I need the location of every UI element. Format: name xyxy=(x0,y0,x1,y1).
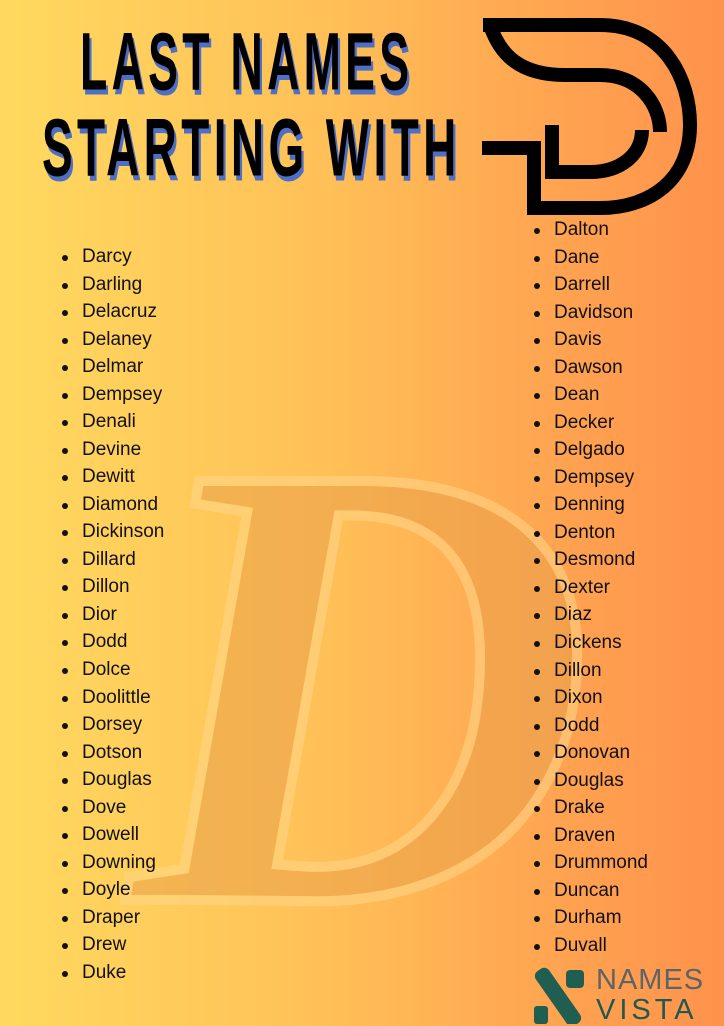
list: left column: Delacruz xyxy=(82,301,157,322)
list: left column: Delaney xyxy=(82,329,152,350)
title xyxy=(42,17,461,194)
list: left column: Dior xyxy=(82,604,117,625)
list: right column: Duvall xyxy=(554,935,607,956)
list: right column: Dawson xyxy=(554,357,623,378)
list: right column: Drummond xyxy=(554,852,648,873)
list: left column: Doolittle xyxy=(82,686,151,708)
list: right column: Dickens xyxy=(554,632,622,653)
list: left column: Drew xyxy=(82,934,126,955)
list: left column: Dove xyxy=(82,797,126,818)
list: left column: Delmar xyxy=(82,356,143,377)
list: left column: Dillon xyxy=(82,576,130,597)
icon: D logo xyxy=(482,18,697,215)
list: left column: Dickinson xyxy=(82,521,164,542)
list: right column: Drake xyxy=(554,797,605,818)
list: right column: Dodd xyxy=(554,715,599,736)
list: right column: Denton xyxy=(554,522,615,543)
list: right column: Dexter xyxy=(554,577,610,598)
list: left column: Dillard xyxy=(82,549,136,570)
list: right column: Dalton xyxy=(554,219,609,240)
list: right column: Donovan xyxy=(554,742,630,763)
list: right column: Duncan xyxy=(554,880,620,901)
list: right column: Davis xyxy=(554,329,602,350)
list: left column: Doyle xyxy=(82,879,131,900)
title: STARTING WITH xyxy=(42,103,461,194)
list: left column: Diamond xyxy=(82,494,158,515)
list: left column: Dolce xyxy=(82,659,131,680)
list: left column: Darling xyxy=(82,274,142,295)
list: right column: Dempsey xyxy=(554,467,634,488)
list: right column: Denning xyxy=(554,494,625,515)
list: right column: Dixon xyxy=(554,687,603,708)
list: left column: Dotson xyxy=(82,742,142,763)
list: right column: Dean xyxy=(554,384,599,405)
list: right column: Delgado xyxy=(554,439,625,460)
logo: Names Vista: NAMES xyxy=(596,964,704,996)
list: right column: Darrell xyxy=(554,274,610,295)
list: left column: Douglas xyxy=(82,769,152,790)
list: left column xyxy=(62,246,164,983)
title: LAST NAMES xyxy=(80,17,413,108)
background decorative big D: D xyxy=(120,331,592,1024)
list: left column: Denali xyxy=(82,411,136,432)
list: left column: Dewitt xyxy=(82,466,135,487)
list: right column: Davidson xyxy=(554,302,633,323)
list: left column: Darcy xyxy=(82,246,132,267)
logo: Names Vista: VISTA xyxy=(596,994,698,1026)
list: left column: Duke xyxy=(82,962,126,983)
list: left column: Dowell xyxy=(82,824,139,845)
list: right column xyxy=(534,219,648,956)
list: right column: Douglas xyxy=(554,770,624,791)
list: right column: Dane xyxy=(554,247,599,268)
list: left column: Devine xyxy=(82,439,141,460)
list: right column: Diaz xyxy=(554,604,592,625)
list: right column: Dillon xyxy=(554,660,602,680)
list: left column: Downing xyxy=(82,852,156,873)
list: left column: Draper xyxy=(82,907,140,928)
list: right column: Draven xyxy=(554,825,615,846)
list: left column: Dempsey xyxy=(82,384,162,405)
list: right column: Decker xyxy=(554,412,614,433)
list: right column: Desmond xyxy=(554,549,635,570)
logo: Names Vista xyxy=(534,964,704,1026)
list: left column: Dorsey xyxy=(82,714,142,735)
list: left column: Dodd xyxy=(82,631,127,652)
list: right column: Durham xyxy=(554,907,622,928)
